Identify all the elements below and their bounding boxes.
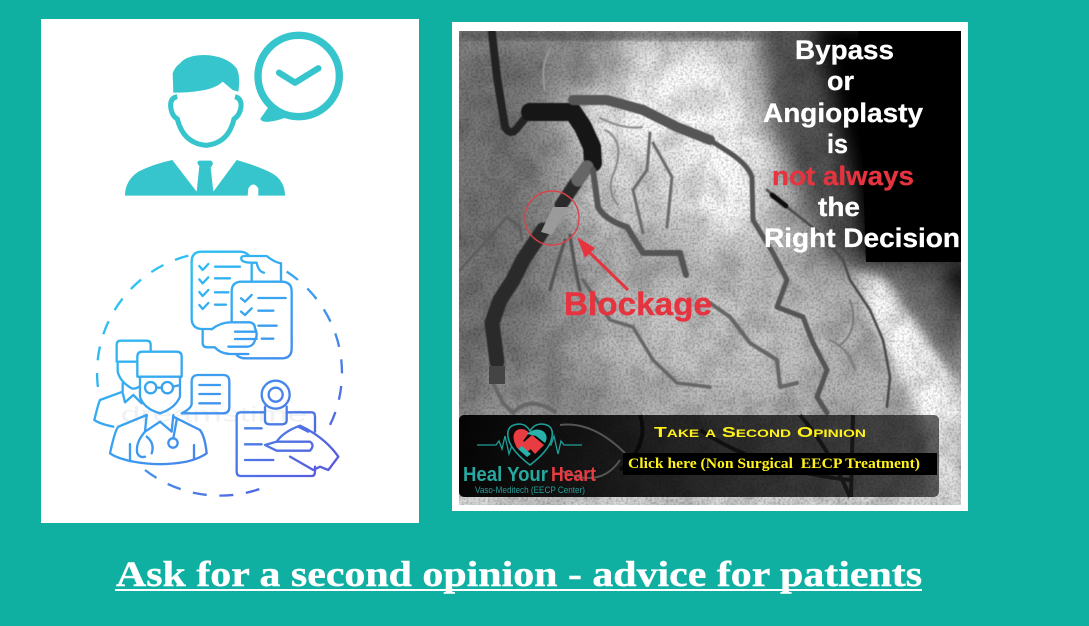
black caption backdrop <box>758 20 868 262</box>
callout: blockage circle, arrow and label: Blockage <box>564 286 712 322</box>
panel: left white icons panel <box>41 19 419 523</box>
button: click here <box>623 453 937 475</box>
caption: bypass or angioplasty: Bypass <box>795 35 894 65</box>
coronary vessels <box>460 33 890 413</box>
panel: angiogram advertisement <box>430 20 975 511</box>
icon: man with clock speech bubble <box>125 35 339 196</box>
caption: bypass or angioplasty: not always <box>772 161 914 191</box>
logo: heal your heart: Heart <box>551 464 596 486</box>
caption: bypass or angioplasty: Angioplasty <box>763 98 923 128</box>
title: Ask for a second opinion - advice for patients <box>116 554 922 594</box>
angiogram photo <box>430 20 975 505</box>
bottom banner <box>459 415 939 497</box>
logo: heal your heart: Vaso-Meditech (EECP Center) <box>475 485 585 496</box>
watermark: dreamstime <box>121 403 307 427</box>
stenosis gap <box>541 207 568 235</box>
banner heading: take a second opinion: Take a Second Opinion <box>654 424 866 441</box>
icon: doctors, checklists and notes in dashed circle <box>94 252 342 496</box>
logo: heal your heart: Heal Your <box>463 464 548 486</box>
caption: bypass or angioplasty: the <box>818 192 860 222</box>
caption: bypass or angioplasty: Right Decision <box>764 223 960 253</box>
caption: bypass or angioplasty <box>763 35 960 253</box>
caption: bypass or angioplasty: or <box>827 66 854 96</box>
caption: bypass or angioplasty: is <box>827 129 848 159</box>
logo: heal your heart <box>463 424 596 496</box>
callout: blockage circle, arrow and label <box>525 191 712 322</box>
button: click here: Click here (Non Surgical EECP Treatment) <box>628 456 920 472</box>
